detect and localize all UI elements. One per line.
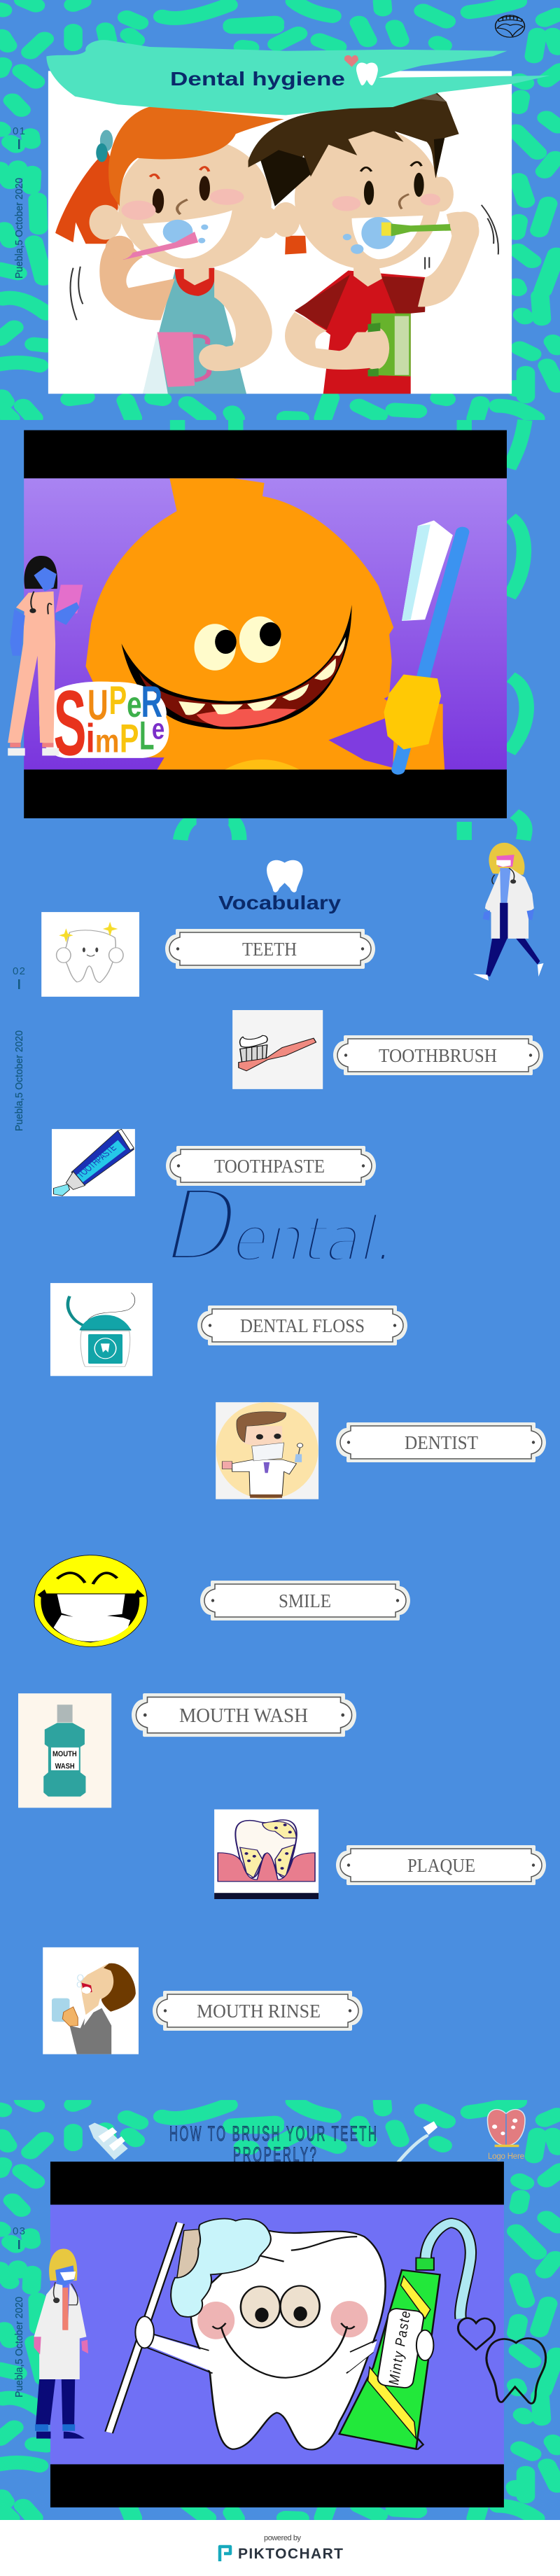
heading: Vocabulary: Vocabulary [218,892,342,913]
girl [55,106,284,393]
picture: mouth rinse [43,1947,139,2054]
video panel: Super Simple monster: e [152,712,164,746]
section 2 background marks [178,420,526,840]
icon: heart and tooth [344,55,378,85]
picture: mouth wash bottle: WASH [55,1761,75,1770]
picture: toothpaste: TOOTHPASTE [74,1143,120,1180]
video panel: tooth with brush and toothpaste [50,2162,504,2507]
video panel: Super Simple monster [24,430,507,818]
label: TEETH: TEETH [242,939,297,960]
boy [248,78,498,393]
logo: Piktochart wordmark: PIKTOCHART [238,2546,343,2562]
video panel: Super Simple monster: U [88,681,108,729]
video panel: Super Simple monster: P [120,717,139,761]
label: PLAQUE [336,1845,546,1885]
label: MOUTH RINSE [153,1991,363,2031]
label: TOOTHPASTE [166,1146,376,1186]
cheeks and eyes [197,2302,234,2339]
cartoon tooth [191,2230,386,2449]
section 3 background pattern [0,2100,560,2519]
monster eyes [195,624,236,671]
video panel: Super Simple monster: S [54,671,86,774]
heading: How to brush your teeth properly?: PROPERLY? [233,2143,316,2166]
toothbrush [398,532,463,769]
icon: toothbrush [398,2121,438,2162]
section number 02: 02 [13,965,25,977]
video panel: Super Simple monster: i [85,717,95,761]
picture: toothpaste [52,1129,135,1196]
label: TOOTHBRUSH [333,1035,543,1075]
figure: nurse in scrubs [8,556,83,755]
label: SMILE: SMILE [279,1590,331,1611]
label: TOOTHPASTE: TOOTHPASTE [214,1156,325,1177]
label: MOUTH WASH [132,1693,356,1737]
icon: vocabulary tooth [267,860,303,892]
video panel: Super Simple monster: R [141,677,162,727]
picture: mouth wash bottle: MOUTH [52,1749,77,1758]
picture: dentist [216,1402,318,1499]
icon: pink tooth logo [487,2109,525,2147]
figure: walking doctor [473,843,544,981]
side date 03: Puebla,5 October 2020 [13,2297,25,2398]
heading brush stroke [46,40,550,115]
video panel: Super Simple monster: m [95,724,119,760]
picture: dental floss [50,1283,153,1376]
label: SMILE [200,1581,410,1620]
cartoon toothbrush and foam [109,2223,181,2432]
cartoon toothpaste tube [416,2258,434,2270]
label: TOOTHBRUSH: TOOTHBRUSH [379,1045,497,1066]
section number 02 [13,965,25,989]
label: DENTAL FLOSS [197,1306,407,1345]
heading: Dental hygiene: Dental hygiene [170,68,345,90]
text: Logo Here: Logo Here [488,2152,524,2161]
label: DENTIST: DENTIST [405,1432,478,1453]
panel: dental hygiene illustration [48,71,512,393]
Super Simple logo [39,682,169,758]
section 1 background pattern [0,0,560,419]
monster mouth [121,605,352,729]
cartoon smile [213,2323,355,2378]
video panel: Super Simple monster: e [127,684,142,724]
label: DENTIST [336,1422,546,1462]
logo: Piktochart mark [220,2547,230,2561]
cartoon arms [146,2334,377,2373]
icon: mouth logo [496,15,524,37]
side date 01: Puebla,5 October 2020 [13,178,25,279]
picture: laughing smiley [34,1555,147,1647]
heading: How to brush your teeth properly?: HOW TO BRUSH YOUR TEETH [169,2122,377,2146]
side date 02: Puebla,5 October 2020 [13,1030,25,1131]
picture: toothbrush [232,1010,323,1089]
label: MOUTH RINSE: MOUTH RINSE [197,2001,321,2022]
icon: toothpaste tube [89,2123,128,2160]
text: powered by: powered by [264,2534,301,2542]
picture: mouth wash bottle [18,1693,111,1808]
section number 03: 03 [13,2225,25,2237]
section number 01 [13,125,25,149]
label: TEETH [165,929,375,969]
heading: How to brush your teeth properly? [169,2122,377,2166]
figure: doctor with pink gloves [34,2249,88,2439]
script word: Dental: Dental. [154,1167,412,1284]
video panel: Super Simple monster: P [109,678,127,723]
monster body [85,478,444,769]
video panel: tooth with brush and toothpaste: Minty Paste [386,2310,414,2386]
label: PLAQUE: PLAQUE [407,1855,475,1876]
footer [0,2520,560,2576]
section number 01: 01 [13,125,25,137]
picture: teeth [41,912,139,997]
label: DENTAL FLOSS: DENTAL FLOSS [240,1315,365,1336]
picture: plaque tooth [214,1809,318,1899]
label: MOUTH WASH: MOUTH WASH [179,1704,308,1727]
icons: heart and tooth outlines [458,2318,546,2403]
video panel: Super Simple monster: L [139,714,154,758]
section number 03 [13,2225,25,2249]
